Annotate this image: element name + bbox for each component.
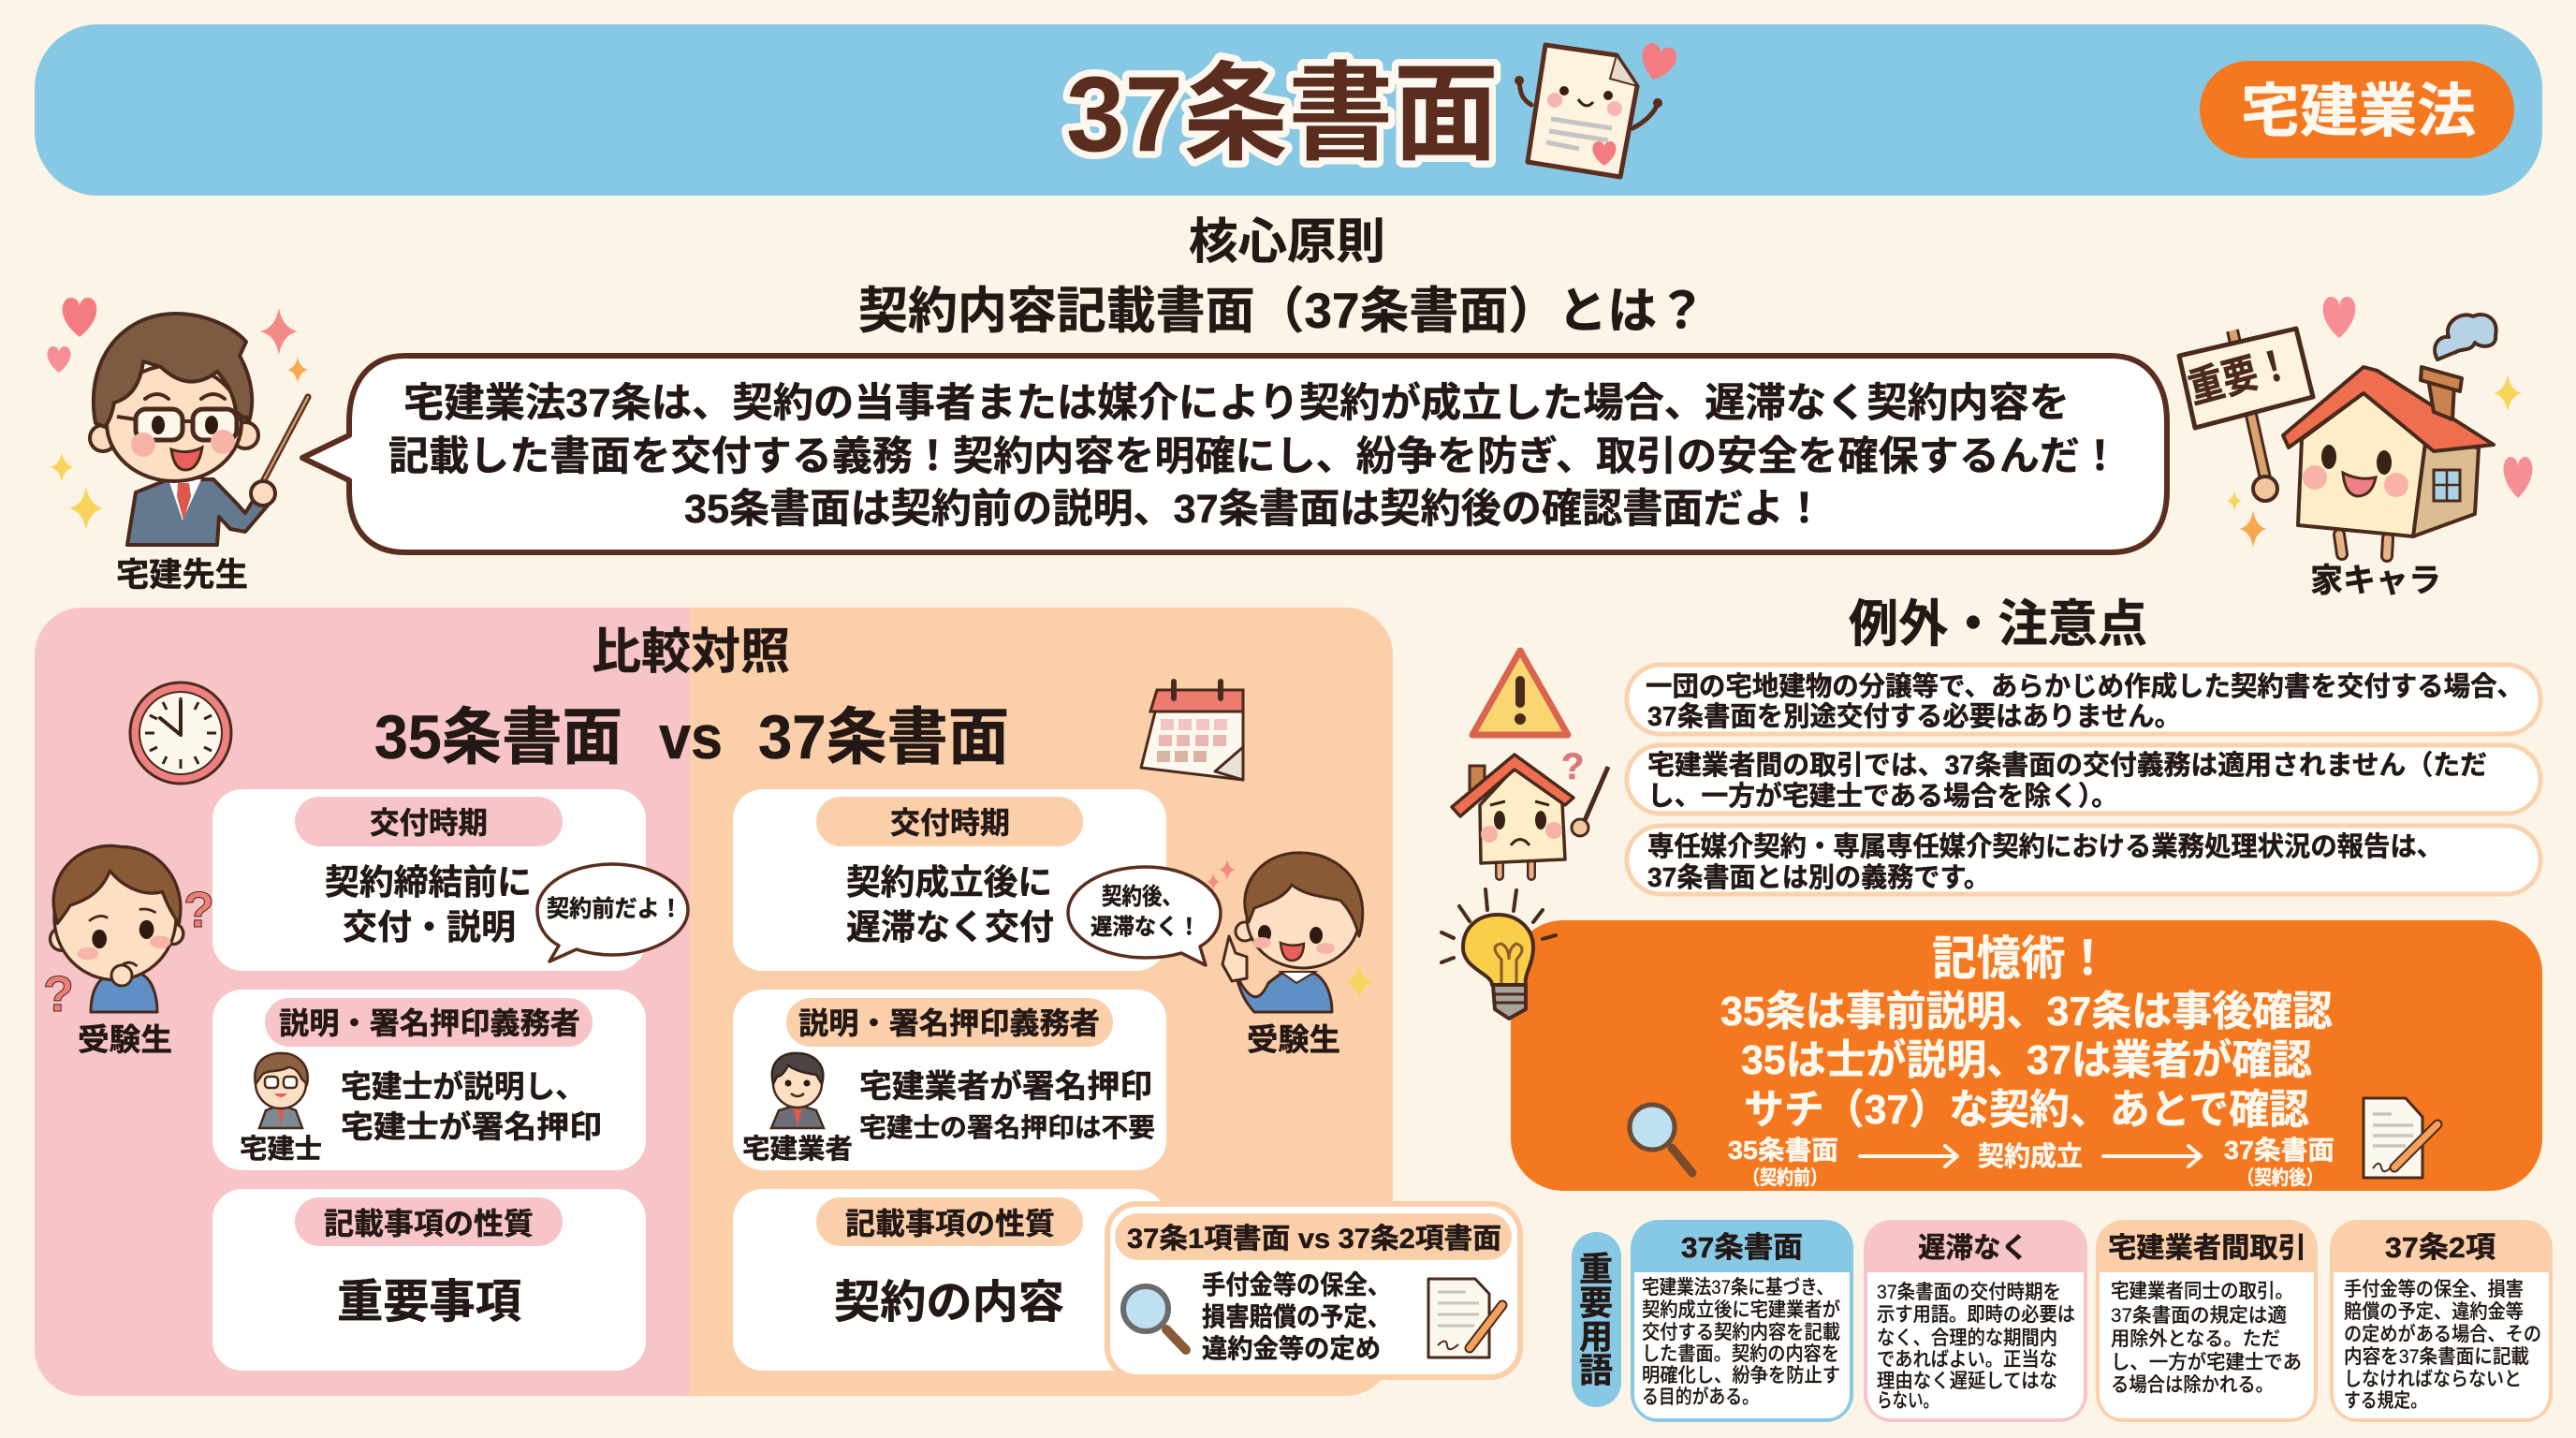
label: 受験生: 受験生 [1247, 1022, 1340, 1057]
character: worried student [43, 845, 214, 1057]
speech bubble: core principle: 記載した書面を交付する義務！契約内容を明確にし、紛争を防ぎ、取引の安全を確保するんだ！ [388, 434, 2120, 479]
callout: 37条1項書面 vs 37条2項書面: 損害賠償の予定、 [1202, 1302, 1391, 1331]
card: 記載事項 37条 [733, 1189, 1166, 1371]
flow: 35条書面 to 37条書面: （契約前） [1743, 1167, 1827, 1189]
flow: 35条書面 to 37条書面: 契約成立 [1978, 1141, 2083, 1172]
note 1: 37条書面を別途交付する必要はありません。 [1647, 701, 2181, 732]
column: 37条書面 cards [733, 789, 1221, 1371]
card: 交付時期 37条 [733, 789, 1166, 971]
term card: 宅建業者間取引: 37条書面の規定は適 [2111, 1305, 2287, 1327]
speech bubble: 契約後、遅滞なく！: 契約後、 [1102, 884, 1182, 910]
card: 記載事項 35条 [212, 1189, 646, 1371]
flow: 35条書面 to 37条書面: 35条書面 [1728, 1136, 1838, 1165]
icon: calendar [1141, 682, 1243, 780]
term card: 37条2項: 賠償の予定、違約金等 [2344, 1301, 2524, 1323]
heading: 35条書面 vs 37条書面 [374, 702, 1009, 771]
heading: 35条書面 vs 37条書面: vs [659, 702, 723, 771]
term card: 37条2項: する規定。 [2344, 1390, 2427, 1412]
heading: 核心原則: 契約内容記載書面（37条書面）とは？ [858, 284, 1706, 339]
term card: 遅滞なく: 理由なく遅延してはな [1877, 1371, 2057, 1392]
label: 重要用語: 要 [1579, 1284, 1613, 1322]
card: 義務者 37条: 宅建業者 [742, 1134, 853, 1165]
term card: 宅建業者間取引 [2096, 1220, 2318, 1422]
card: 義務者 35条: 宅建士 [240, 1134, 322, 1165]
note 2: 宅建業者間の取引では、37条書面の交付義務は適用されません（ただ [1647, 750, 2487, 781]
term card: 37条2項 [2330, 1220, 2553, 1422]
label: 宅建先生: 宅建先生 [116, 557, 248, 594]
icon: document and pencil [2364, 1098, 2437, 1178]
term card: 37条2項: 手付金等の保全、損害 [2344, 1279, 2524, 1300]
heading: 比較対照: 比較対照 [592, 625, 790, 680]
callout: 37条1項書面 vs 37条2項書面: 37条1項書面 vs 37条2項書面 [1127, 1224, 1501, 1255]
character: worried student: ? [43, 966, 74, 1022]
note 1 [1627, 665, 2540, 734]
icon: 宅建業者 [771, 1053, 824, 1128]
term card: 37条書面: 交付する契約内容を記載 [1642, 1322, 1840, 1343]
term card: 遅滞なく: 37条書面の交付時期を [1877, 1282, 2061, 1303]
character: pointing student [1207, 853, 1373, 1057]
callout: 37条1項書面 vs 37条2項書面: 違約金等の定め [1202, 1334, 1381, 1363]
character: 宅建先生 [47, 298, 308, 594]
label: 家キャラ: 家キャラ [2310, 563, 2441, 599]
speech bubble: 契約後、遅滞なく！ [1068, 867, 1221, 965]
term card: 37条2項: の定めがある場合、その [2344, 1324, 2541, 1345]
term card: 37条書面 [1631, 1220, 1853, 1422]
term card: 37条書面: した書面。契約の内容を [1642, 1343, 1839, 1365]
note 3 [1627, 826, 2540, 894]
heading: 核心原則: 核心原則 [1189, 215, 1385, 270]
card: 義務者 35条: 宅建士が説明し、 [341, 1069, 586, 1104]
panel: 記憶術: 35は士が説明、37は業者が確認 [1741, 1037, 2312, 1083]
label: 重要用語: 重 [1579, 1250, 1613, 1288]
icon: warning triangle [1472, 651, 1568, 735]
panel: 記憶術 [1511, 920, 2542, 1191]
flow: 35条書面 to 37条書面: 37条書面 [2224, 1136, 2334, 1165]
column: 35条書面 cards [212, 789, 688, 1371]
label: 重要用語: 用 [1579, 1317, 1613, 1356]
callout: 37条1項書面 vs 37条2項書面 [1107, 1204, 1520, 1377]
icon: 宅建士 [255, 1053, 308, 1128]
speech bubble: 契約前だよ！: 契約前だよ！ [547, 896, 682, 922]
heading: 35条書面 vs 37条書面: 37条書面 [758, 702, 1009, 771]
term card: 37条書面: る目的がある。 [1642, 1387, 1759, 1408]
term card: 37条書面: 明確化し、紛争を防止す [1642, 1365, 1840, 1387]
exception notes [1627, 665, 2540, 894]
term card: 宅建業者間取引: 宅建業者同士の取引。 [2111, 1281, 2293, 1302]
header banner [35, 24, 2542, 196]
flow: 35条書面 to 37条書面: （契約後） [2237, 1167, 2323, 1189]
card: 記載事項 37条: 契約の内容 [834, 1278, 1064, 1328]
term card: 37条2項: しなければならないと [2344, 1369, 2522, 1390]
icon: document and pencil [1428, 1279, 1502, 1357]
card: 義務者 35条: 説明・署名押印義務者 [279, 1006, 580, 1040]
icon: magnifier [1123, 1286, 1186, 1350]
speech bubble: 契約後、遅滞なく！: 遅滞なく！ [1090, 915, 1200, 940]
term card: 宅建業者間取引: 宅建業者間取引 [2108, 1233, 2306, 1264]
arrow [2103, 1146, 2201, 1167]
character: worried house [1452, 746, 1608, 876]
card: 義務者 35条: 宅建士が署名押印 [341, 1109, 602, 1144]
arrow [1860, 1146, 1957, 1167]
label: 重要用語 [1572, 1232, 1621, 1407]
card: 義務者 37条: 宅建業者が署名押印 [859, 1068, 1152, 1105]
title: 37条書面 [1066, 55, 1499, 174]
term card: 37条書面: 37条書面 [1681, 1231, 1803, 1264]
note 3: 専任媒介契約・専属専任媒介契約における業務処理状況の報告は、 [1647, 831, 2443, 862]
term card: 遅滞なく: らない。 [1877, 1390, 1939, 1412]
icon: light bulb [1442, 889, 1556, 1019]
callout: 37条1項書面 vs 37条2項書面: 手付金等の保全、 [1202, 1270, 1391, 1299]
badge: 宅建業法: 宅建業法 [2241, 80, 2476, 144]
note 2: し、一方が宅建士である場合を除く）。 [1647, 780, 2118, 812]
term card: 宅建業者間取引: る場合は除かれる。 [2111, 1374, 2274, 1396]
term card: 遅滞なく: 示す用語。即時の必要は [1877, 1304, 2075, 1326]
card: 記載事項 37条: 記載事項の性質 [845, 1207, 1055, 1240]
card: 義務者 35条 [212, 990, 646, 1170]
panel: 記憶術: 35条は事前説明、37条は事後確認 [1720, 989, 2333, 1034]
speech bubble: 契約前だよ！ [537, 864, 688, 961]
badge: 宅建業法 [2200, 61, 2514, 158]
character: 家キャラ: 重要！ [2184, 341, 2297, 413]
card: 交付時期 35条: 契約締結前に [325, 863, 532, 902]
panel: comparison [35, 608, 1520, 1396]
card: 義務者 37条: 説明・署名押印義務者 [798, 1006, 1100, 1040]
term card: 37条2項: 37条2項 [2385, 1231, 2496, 1264]
card: 交付時期 37条: 交付時期 [890, 806, 1010, 840]
heading: 記憶術！: 記憶術！ [1932, 932, 2110, 985]
label: 重要用語: 語 [1579, 1351, 1613, 1389]
heading: 例外・注意点: 例外・注意点 [1849, 596, 2147, 653]
note 3: 37条書面とは別の義務です。 [1647, 862, 1990, 893]
term card: 宅建業者間取引: 用除外となる。ただ [2111, 1328, 2280, 1350]
card: 交付時期 35条 [212, 789, 646, 971]
speech bubble: core principle: 宅建業法37条は、契約の当事者または媒介により契約が成立した場合、遅滞なく契約内容を [403, 381, 2070, 426]
card: 交付時期 35条: 交付時期 [370, 806, 488, 840]
icon: smiling document [1515, 41, 1679, 177]
icon: clock [130, 682, 231, 784]
term card: 37条2項: 内容を37条書面に記載 [2344, 1346, 2529, 1368]
heading: 35条書面 vs 37条書面: 35条書面 [374, 702, 622, 771]
speech bubble: core principle [302, 356, 2167, 552]
card: 記載事項 35条: 重要事項 [337, 1277, 521, 1328]
term card: 37条書面: 宅建業法37条に基づき、 [1642, 1277, 1834, 1299]
speech bubble: core principle: 35条書面は契約前の説明、37条書面は契約後の確認書面だよ！ [684, 487, 1824, 532]
term card: 遅滞なく: 遅滞なく [1918, 1233, 2028, 1264]
card: 義務者 37条 [733, 990, 1166, 1170]
term card: 宅建業者間取引: し、一方が宅建士であ [2111, 1352, 2302, 1373]
character: worried house: ? [1561, 746, 1584, 787]
character: 家キャラ [2179, 297, 2532, 599]
panel: 記憶術: サチ（37）な契約、あとで確認 [1744, 1087, 2309, 1133]
card: 交付時期 37条: 契約成立後に [846, 863, 1052, 902]
icon: magnifier [1630, 1105, 1692, 1173]
term card: 遅滞なく: なく、合理的な期間内 [1877, 1328, 2057, 1349]
flow: 35条書面 to 37条書面 [1728, 1136, 2334, 1189]
note 1: 一団の宅地建物の分譲等で、あらかじめ作成した契約書を交付する場合、 [1646, 671, 2524, 702]
term card: 遅滞なく: であればよい。正当な [1877, 1349, 2057, 1371]
term card: 遅滞なく [1864, 1220, 2087, 1422]
card: 交付時期 37条: 遅滞なく交付 [846, 908, 1054, 946]
character: worried student: ? [183, 882, 214, 938]
label: 受験生: 受験生 [78, 1022, 172, 1057]
card: 交付時期 35条: 交付・説明 [343, 908, 516, 946]
card: 記載事項 35条: 記載事項の性質 [324, 1207, 534, 1240]
heading: 核心原則 [858, 215, 1706, 339]
note 2 [1627, 745, 2540, 814]
term card: 37条書面: 契約成立後に宅建業者が [1642, 1299, 1840, 1321]
card: 義務者 37条: 宅建士の署名押印は不要 [859, 1113, 1155, 1142]
